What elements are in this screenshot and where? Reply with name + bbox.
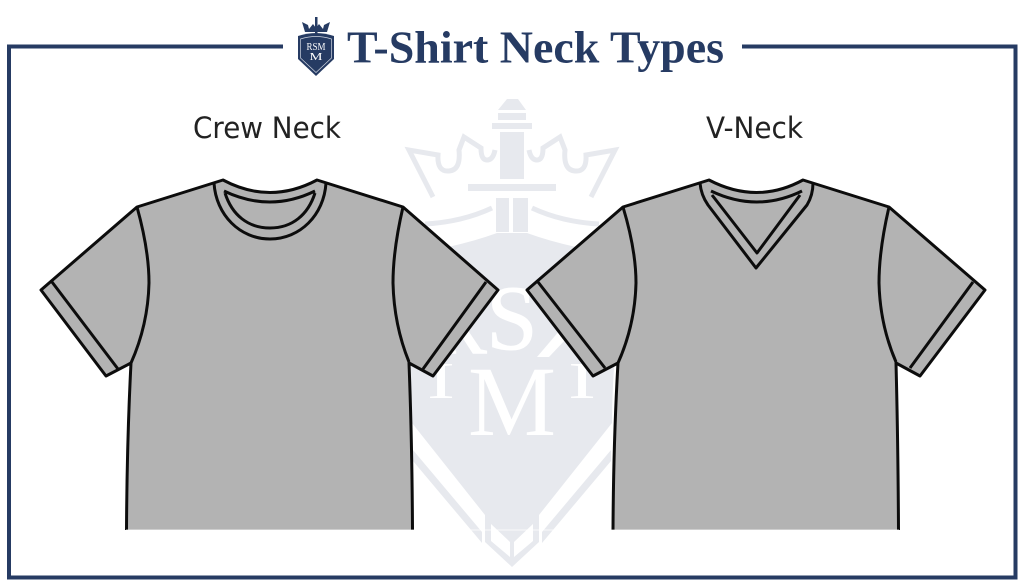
logo: crest icon: RSM (306, 42, 326, 53)
crew shirt outline (41, 180, 498, 530)
v-neck armholes (618, 207, 896, 363)
label: v-neck: V-Neck (706, 111, 803, 145)
shirt hem line (126, 530, 899, 531)
v-neck cuffs (538, 282, 973, 368)
watermark: crown band (425, 208, 599, 224)
watermark: monogram: R (429, 276, 487, 372)
illustration: v-neck t-shirt (527, 180, 985, 530)
v-neck shirt fill (527, 180, 985, 530)
watermark: crown (409, 137, 615, 197)
label: crew neck: Crew Neck (193, 111, 341, 145)
watermark: shield lower band (413, 450, 611, 543)
illustration: crew neck t-shirt (41, 180, 498, 530)
watermark: monogram (427, 267, 596, 457)
v-neck collar (700, 183, 813, 268)
crew armholes (131, 207, 409, 363)
v-neck shirt outline (527, 180, 985, 530)
watermark: shield body (404, 233, 620, 567)
title group (298, 17, 724, 76)
crew collar (214, 183, 326, 239)
watermark: sword (468, 99, 556, 232)
watermark: monogram: I (568, 353, 596, 410)
watermark crest (404, 99, 620, 567)
watermark: monogram: I (427, 353, 455, 410)
logo: crest icon (298, 17, 334, 76)
title: T-Shirt Neck Types (347, 22, 724, 72)
logo: crest icon: M (310, 52, 323, 63)
crew shirt fill (41, 180, 498, 530)
watermark: tip panels (491, 524, 533, 557)
watermark: monogram: M (468, 346, 556, 457)
crew cuffs (52, 282, 486, 369)
watermark: monogram: S (486, 267, 538, 369)
